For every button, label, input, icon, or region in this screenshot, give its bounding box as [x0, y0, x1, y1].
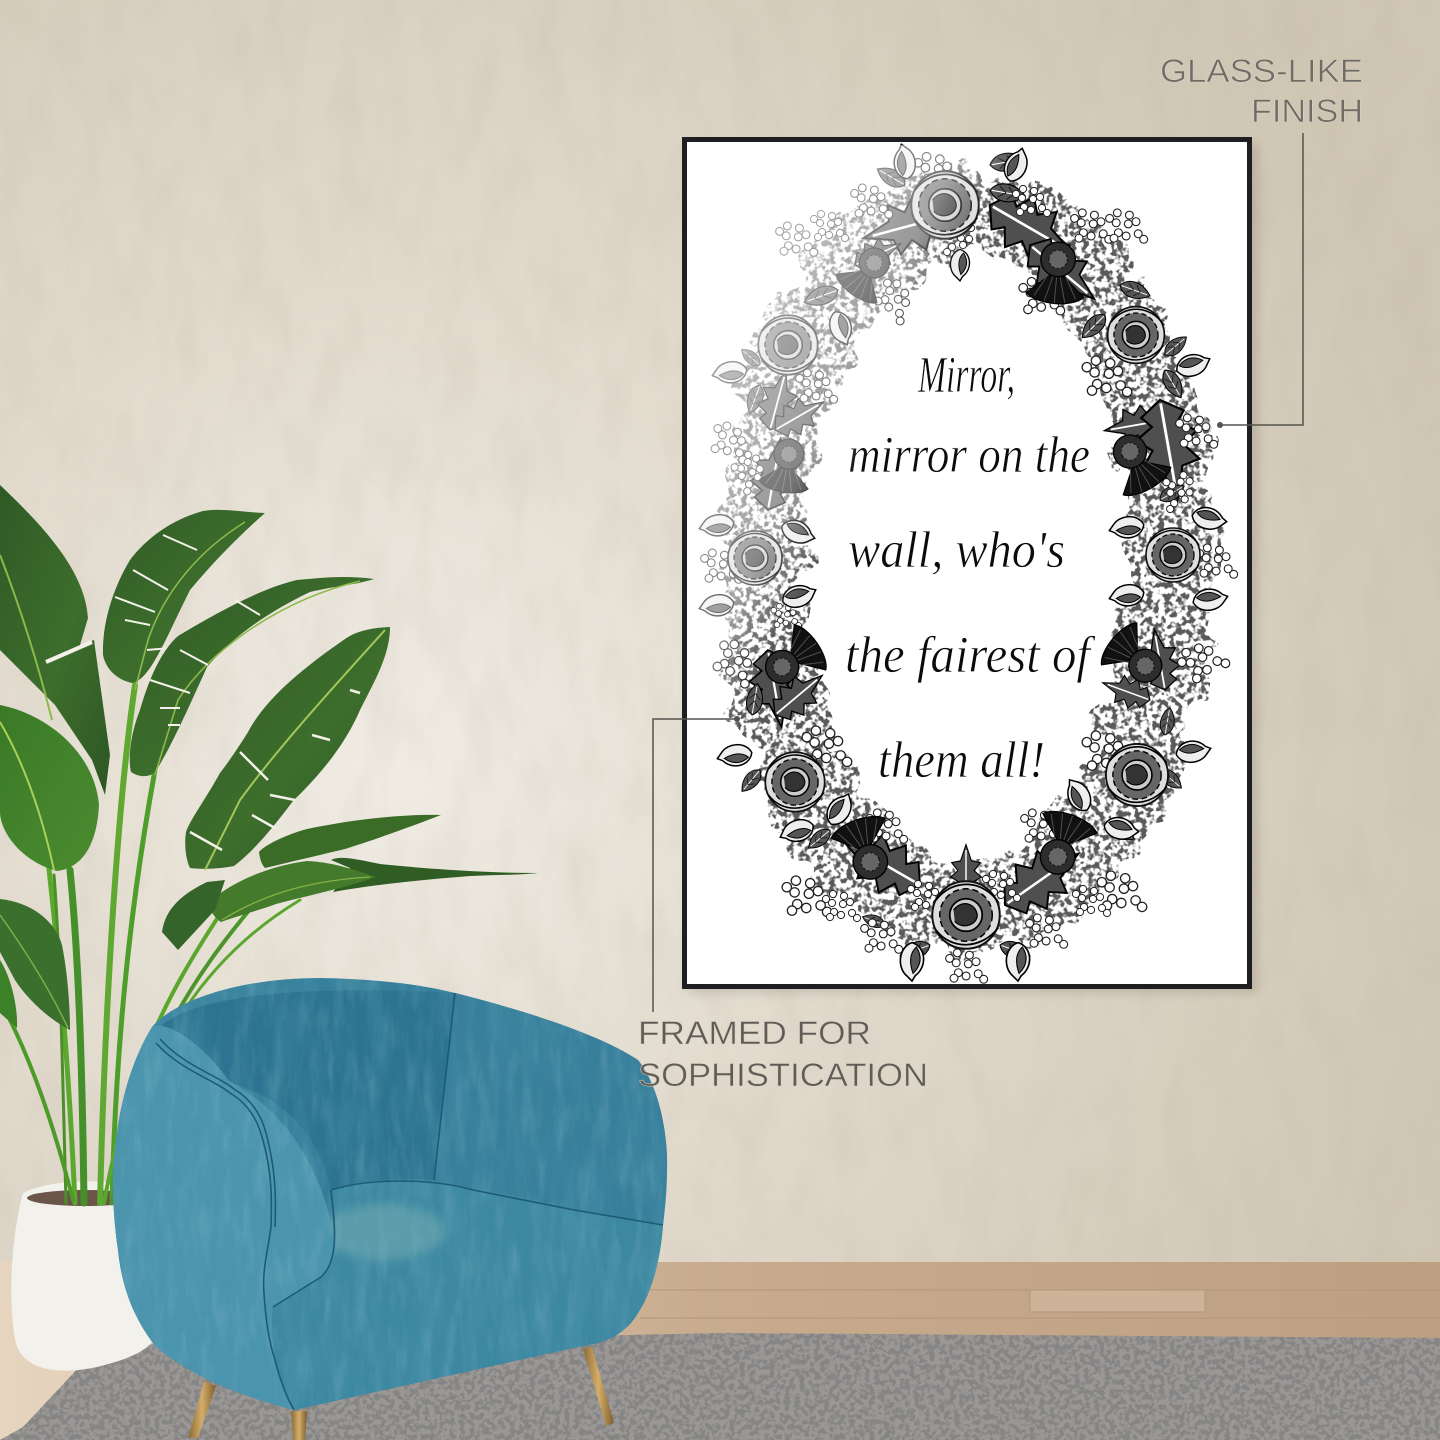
callout: glass-like finish: FINISH	[1251, 93, 1363, 129]
plant leaves	[0, 485, 538, 1030]
black frame	[684, 140, 1250, 986]
framed poster	[684, 140, 1258, 993]
callout: glass-like finish	[1160, 53, 1363, 428]
handwritten quote: Mirror,	[917, 347, 1015, 404]
callout: framed for sophistication	[638, 716, 928, 1093]
chair seat	[272, 1181, 663, 1410]
plant pot	[11, 1181, 160, 1371]
wreath mottled band	[762, 211, 1172, 911]
floral wreath	[697, 142, 1238, 983]
wreath roses	[728, 171, 1200, 949]
leaf: lower right front	[210, 861, 376, 922]
leaf: bright front left	[0, 705, 99, 871]
armchair	[100, 970, 680, 1440]
wooden floor	[0, 1262, 1440, 1440]
handwritten quote: the fairest of	[845, 627, 1096, 684]
leaf: lower left	[0, 899, 70, 1030]
callout: framed for sophistication: SOPHISTICATION	[638, 1057, 928, 1093]
chair piping	[156, 993, 663, 1410]
leaf: centre upper	[103, 510, 265, 690]
leaf: lower behind	[162, 880, 225, 950]
leaf: centre long	[130, 577, 374, 776]
plant stems	[10, 685, 300, 1203]
chair right back	[434, 993, 667, 1225]
callout: glass-like finish: GLASS-LIKE	[1160, 53, 1363, 89]
chair legs	[188, 1347, 614, 1440]
rug	[0, 1330, 1440, 1440]
grey fade overlay	[690, 145, 1245, 981]
leaf: lower right short	[259, 815, 441, 868]
leaf: lower right long	[331, 858, 538, 892]
chair inner back	[162, 990, 455, 1190]
wreath buds	[697, 142, 1230, 981]
chair highlight	[325, 1204, 445, 1260]
wreath clover sprays	[701, 152, 1238, 983]
handwritten quote: mirror on the	[848, 427, 1090, 484]
frame shadow	[688, 143, 1258, 993]
chair left arm	[113, 1026, 333, 1410]
wreath thistles	[753, 236, 1176, 888]
handwritten quote: them all!	[878, 732, 1045, 789]
leaf: upper left	[0, 485, 110, 795]
chair body	[113, 978, 667, 1410]
handwritten quote: wall, who's	[848, 522, 1065, 579]
callout: framed for sophistication: FRAMED FOR	[638, 1015, 871, 1051]
leaf: lowest left	[0, 960, 17, 1028]
leaf: large right	[185, 627, 390, 870]
wreath leaves	[737, 150, 1208, 963]
handwritten quote	[845, 347, 1096, 789]
